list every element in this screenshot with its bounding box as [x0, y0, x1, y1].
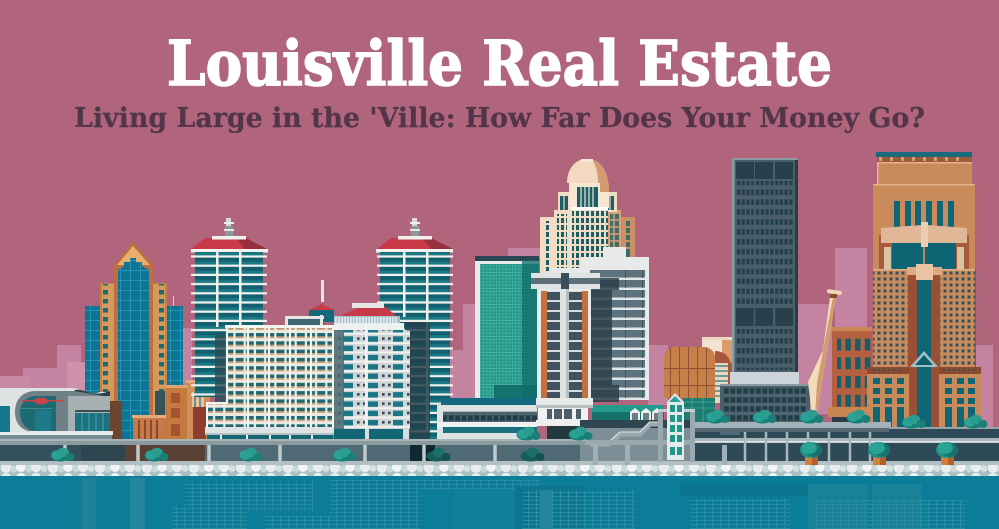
pipe ramp and elevator tower	[585, 393, 740, 466]
floors	[195, 252, 263, 397]
crown panels	[736, 162, 754, 179]
lower body	[873, 269, 976, 369]
small brick buildings	[132, 380, 211, 449]
water with reflections	[0, 476, 999, 529]
upper plaza	[695, 422, 891, 428]
tower: blue glass with orange wings	[85, 242, 183, 440]
lower window grid	[736, 329, 793, 370]
colonnade	[334, 316, 400, 324]
brick building beside bat	[828, 327, 872, 422]
outer shoulders	[540, 217, 635, 277]
lower rail	[695, 438, 999, 443]
dome	[567, 160, 608, 183]
white and teal apartment block	[334, 303, 410, 439]
lower deck bushes	[50, 448, 74, 462]
blue flanking wings	[85, 306, 183, 440]
podium	[205, 427, 334, 435]
crown	[876, 152, 972, 157]
title: Louisville Real Estate	[167, 27, 832, 100]
red roof	[338, 306, 398, 317]
ramp legs	[593, 445, 598, 466]
hotel building	[205, 280, 335, 440]
pale background silhouettes	[0, 248, 993, 435]
wing	[207, 403, 228, 428]
main block	[225, 325, 335, 328]
spire frame	[114, 242, 153, 440]
building reflections	[78, 478, 965, 529]
triangle	[910, 351, 938, 367]
orange side wings	[100, 283, 167, 440]
upper shoulders	[558, 192, 617, 212]
rear roof with spire	[321, 280, 324, 302]
tower with central mast	[531, 268, 664, 440]
roof	[191, 238, 267, 249]
lower block	[720, 384, 810, 422]
teal shaft	[917, 280, 931, 427]
teal band and small houses	[592, 405, 664, 421]
centre shaft	[569, 183, 609, 208]
recess	[879, 235, 969, 270]
side frames	[658, 410, 663, 462]
floors	[380, 252, 450, 440]
floors	[334, 330, 410, 429]
tower with red roof right	[376, 218, 453, 440]
keystone	[907, 267, 942, 275]
pillars	[65, 445, 495, 461]
waterfront deck and road	[0, 420, 999, 467]
orange landmark tower	[867, 152, 981, 428]
slots	[894, 201, 954, 227]
roof	[377, 238, 453, 249]
dark office tower	[720, 158, 810, 422]
base	[334, 429, 410, 439]
shadow	[405, 322, 430, 440]
copper drum building	[664, 337, 732, 422]
band	[867, 367, 981, 374]
upper body	[873, 184, 975, 274]
upper deck bushes	[516, 427, 540, 440]
ramp	[590, 424, 660, 444]
foam shoreline	[0, 465, 999, 476]
wing lintel	[881, 225, 967, 243]
light base	[730, 372, 799, 384]
trees	[800, 442, 822, 469]
walkway	[0, 461, 999, 466]
base	[867, 374, 909, 428]
mid panels	[736, 308, 754, 326]
central glass	[118, 258, 149, 440]
base	[536, 398, 593, 408]
subtitle: Living Large in the 'Ville: How Far Does Your Money Go?	[74, 103, 925, 134]
low pavilion	[437, 398, 537, 440]
domed tower	[540, 159, 635, 277]
green glass tower	[475, 256, 539, 398]
grey striped building	[581, 247, 649, 402]
upper window grid	[736, 181, 793, 306]
antenna	[226, 218, 231, 226]
elevator shaft	[667, 393, 684, 460]
main road	[0, 439, 590, 445]
arena building	[0, 388, 113, 439]
bushes and trees	[50, 410, 988, 469]
dark under-deck	[0, 445, 999, 461]
tower with red roof left	[191, 218, 268, 405]
antenna	[412, 218, 417, 226]
giant baseball bat	[808, 289, 842, 415]
top cap	[550, 268, 590, 274]
